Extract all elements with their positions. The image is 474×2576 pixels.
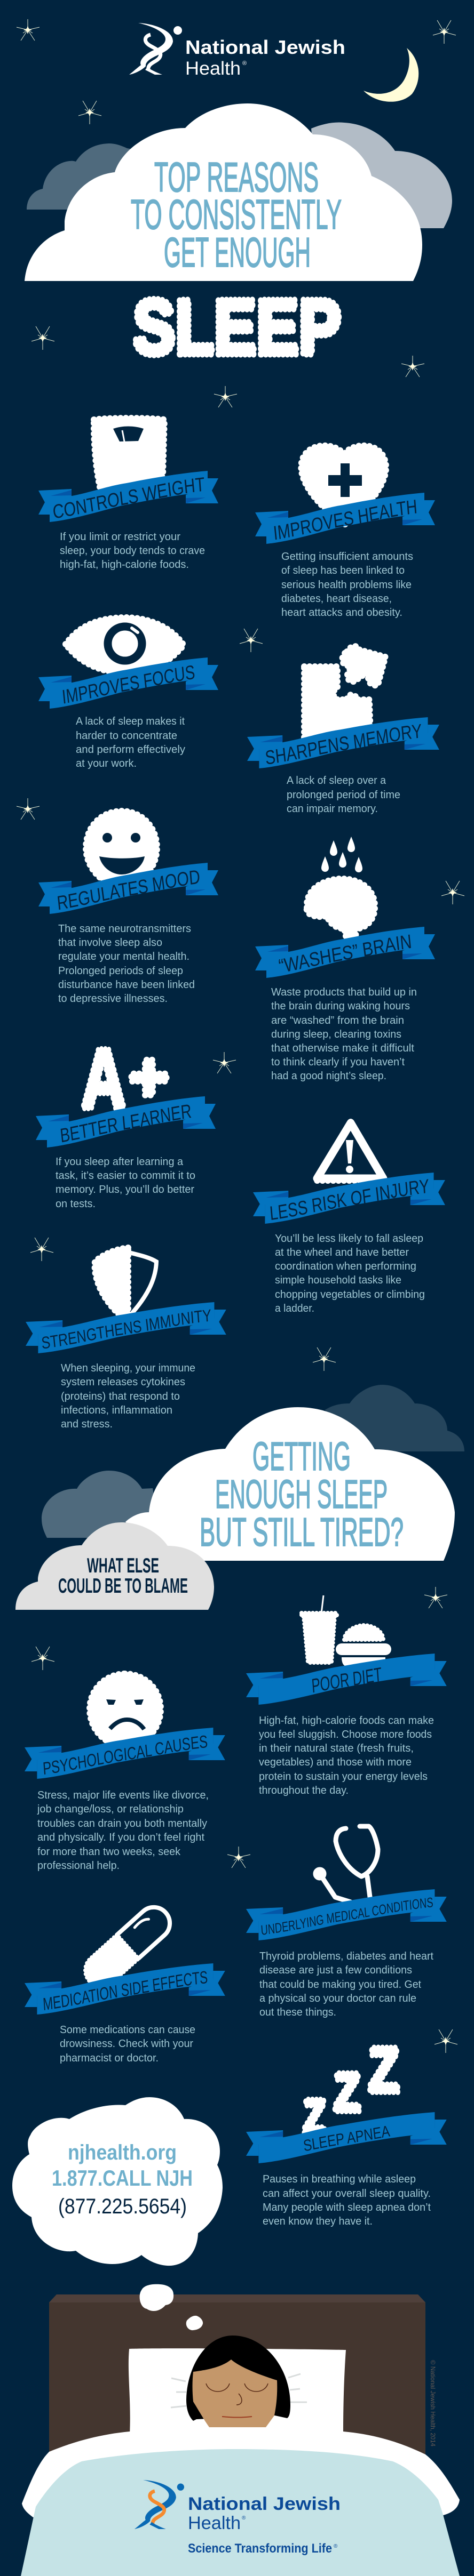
icon: A+: A	[81, 1031, 126, 1126]
icon: zzz: Z	[334, 2062, 360, 2123]
text block: during sleep, clearing toxins	[271, 1029, 401, 1040]
text block: harder to concentrate	[76, 730, 177, 742]
text block: pharmacist or doctor.	[60, 2052, 159, 2064]
feature: less risk of injury	[253, 1119, 445, 1314]
text block: throughout the day.	[259, 1785, 349, 1796]
logo: National Jewish Health bottom: Science Transforming Life	[188, 2541, 332, 2556]
text block: at the wheel and have better	[275, 1247, 409, 1258]
text block	[58, 923, 195, 1005]
icon: drink and burger	[302, 1595, 391, 1666]
text block: prolonged period of time	[287, 789, 400, 801]
text block: Stress, major life events like divorce,	[37, 1789, 209, 1801]
text block: serious health problems like	[281, 579, 412, 591]
text block: chopping vegetables or climbing	[275, 1289, 425, 1301]
text block: If you limit or restrict your	[60, 531, 180, 543]
text block: that involve sleep also	[58, 937, 162, 949]
text block: of sleep has been linked to	[281, 565, 405, 576]
text block: A lack of sleep over a	[287, 775, 386, 787]
feature: poor diet	[246, 1595, 447, 1796]
heading: getting enough sleep but still tired	[200, 1434, 404, 1554]
banner: CONTROLS WEIGHT	[53, 477, 204, 518]
text block: A lack of sleep makes it	[76, 716, 185, 727]
text block	[61, 1362, 195, 1430]
thought cloud: contact: njhealth.org	[68, 2141, 177, 2164]
text block: even know they have it.	[263, 2216, 373, 2227]
thought cloud: contact: (877.225.5654)	[58, 2195, 187, 2218]
feature: controls weight	[38, 415, 218, 571]
banner: STRENGTHENS IMMUNITY	[42, 1310, 211, 1349]
logo: National Jewish Health bottom	[135, 2480, 341, 2556]
feature: washes brain	[255, 837, 435, 1082]
logo: National Jewish Health bottom: Health	[188, 2513, 241, 2533]
text block: High-fat, high-calorie foods can make	[259, 1715, 434, 1727]
text block: If you sleep after learning a	[56, 1156, 184, 1168]
banner	[36, 1096, 216, 1147]
text block: heart attacks and obesity.	[281, 607, 402, 619]
banner	[255, 927, 435, 978]
cloud: what else could be to blame: COULD BE TO BLAME	[58, 1575, 188, 1598]
text block: the brain during waking hours	[271, 1000, 410, 1012]
text block	[60, 2024, 195, 2064]
text block	[281, 551, 413, 619]
text block: and physically. If you don’t feel right	[37, 1832, 204, 1843]
text block: had a good night’s sleep.	[271, 1070, 386, 1082]
banner: IMPROVES HEALTH	[274, 500, 416, 540]
banner	[246, 1654, 447, 1705]
banner: PSYCHOLOGICAL CAUSES	[43, 1735, 207, 1775]
text block: disturbance have been linked	[58, 979, 195, 991]
text block	[287, 775, 400, 815]
text block: Many people with sleep apnea don’t	[263, 2202, 431, 2213]
section clouds	[42, 1385, 464, 1561]
text block: can affect your overall sleep quality.	[263, 2188, 431, 2200]
feature: psychological causes	[25, 1671, 225, 1872]
banner: SLEEP APNEA	[304, 2126, 391, 2151]
text block: and stress.	[61, 1418, 113, 1430]
text block: protein to sustain your energy levels	[259, 1771, 428, 1783]
person: sleeping head	[186, 2336, 290, 2427]
banner: BETTER LEARNER	[61, 1105, 191, 1142]
logo: National Jewish Health top: ®	[242, 60, 247, 67]
text block: Waste products that build up in	[271, 986, 417, 998]
icon: stethoscope	[315, 1826, 378, 1902]
icon: heart with cross	[301, 446, 386, 525]
text block: that could be making you tired. Get	[259, 1979, 421, 1991]
text block: diabetes, heart disease,	[281, 593, 392, 605]
thought cloud: contact: 1.877.CALL NJH	[52, 2165, 193, 2190]
text block	[259, 1951, 433, 2018]
logo: National Jewish Health bottom: ®	[334, 2543, 338, 2549]
feature: medication side effects	[25, 1905, 225, 2064]
text block	[271, 986, 417, 1082]
text block	[60, 531, 205, 571]
icon: zzz: Z	[368, 2034, 399, 2106]
moon	[364, 48, 418, 102]
text block: on tests.	[56, 1198, 96, 1210]
title: GET ENOUGH	[164, 229, 311, 276]
icon: brain	[307, 879, 375, 941]
icon: smiley	[86, 811, 157, 886]
icon: scale	[94, 418, 164, 493]
text block: Pauses in breathing while asleep	[263, 2173, 416, 2185]
text block: system releases cytokines	[61, 1376, 185, 1388]
logo: National Jewish Health top: National Jewish	[185, 36, 345, 58]
text block: high-fat, high-calorie foods.	[60, 559, 189, 571]
text block: you feel sluggish. Choose more foods	[259, 1729, 432, 1740]
logo: National Jewish Health top: Health	[185, 58, 241, 79]
icon: zzz	[303, 2034, 399, 2144]
text block: professional help.	[37, 1860, 120, 1872]
cloud: what else could be to blame	[15, 1522, 214, 1610]
text block: in their natural state (fresh fruits,	[259, 1743, 414, 1754]
text block: are “washed” from the brain	[271, 1015, 404, 1026]
banner: “WASHES” BRAIN	[279, 934, 411, 972]
text block	[263, 2173, 431, 2227]
text block: for more than two weeks, seek	[37, 1846, 181, 1858]
text block: job change/loss, or relationship	[37, 1803, 184, 1815]
text block: Prolonged periods of sleep	[58, 965, 183, 977]
blanket	[21, 2431, 460, 2576]
icon: shield	[95, 1248, 156, 1316]
feature: sleep apnea	[246, 2034, 447, 2227]
text block: can impair memory.	[287, 803, 378, 815]
banner: SHARPENS MEMORY	[266, 724, 421, 764]
copyright: © National Jewish Health, 2014	[429, 2360, 437, 2446]
icon: eye	[66, 617, 184, 673]
banner: LESS RISK OF INJURY	[270, 1179, 428, 1220]
icon: zzz: Z	[303, 2090, 326, 2144]
text block: You’ll be less likely to fall asleep	[275, 1233, 423, 1245]
text block	[56, 1156, 195, 1210]
bed headboard	[49, 2294, 425, 2458]
banner	[38, 657, 218, 709]
icon: water drops	[321, 837, 362, 872]
banner: MEDICATION SIDE EFFECTS	[43, 1971, 207, 2010]
text block: out these things.	[259, 2007, 336, 2018]
text block: coordination when performing	[275, 1261, 416, 1272]
text block: at your work.	[76, 758, 137, 769]
icon: puzzle	[304, 646, 385, 739]
thought cloud: contact	[12, 2097, 223, 2266]
text block	[76, 716, 185, 769]
header clouds	[25, 103, 452, 281]
heading: getting enough sleep but still tired: GETTING	[252, 1434, 351, 1479]
text block: troubles can drain you both mentally	[37, 1818, 207, 1829]
icon: A+: +	[129, 1038, 169, 1116]
text block: regulate your mental health.	[58, 951, 189, 962]
text block: that otherwise make it difficult	[271, 1042, 414, 1054]
feature: better learner	[36, 1031, 216, 1210]
feature: regulates mood	[38, 808, 218, 1005]
title	[131, 154, 342, 276]
text block: simple household tasks like	[275, 1274, 401, 1286]
text block: drowsiness. Check with your	[60, 2038, 193, 2050]
text block: (proteins) that respond to	[61, 1391, 180, 1402]
banner: REGULATES MOOD	[58, 870, 200, 910]
text block: Getting insufficient amounts	[281, 551, 413, 563]
logo: National Jewish Health bottom: National Jewish	[188, 2494, 341, 2514]
text block: memory. Plus, you’ll do better	[56, 1184, 194, 1195]
heading: SLEEP: SLEEP	[133, 284, 341, 371]
feature: sharpens memory	[247, 643, 439, 815]
feature: strengthens immunity	[26, 1245, 226, 1430]
icon: sad face	[90, 1674, 161, 1746]
text block: When sleeping, your immune	[61, 1362, 195, 1374]
text block: disease are just a few conditions	[259, 1964, 412, 1976]
banner: IMPROVES FOCUS	[63, 665, 194, 704]
cloud: what else could be to blame: WHAT ELSE	[87, 1554, 159, 1577]
icon: warning triangle	[316, 1122, 384, 1181]
text block	[37, 1789, 209, 1872]
banner: UNDERLYING MEDICAL CONDITIONS	[262, 1897, 433, 1935]
title: TOP REASONS	[154, 154, 319, 200]
text block: vegetables) and those with more	[259, 1756, 412, 1768]
feature: improves focus	[38, 614, 218, 769]
text block: Some medications can cause	[60, 2024, 195, 2036]
text block: a physical so your doctor can rule	[259, 1993, 416, 2004]
text block: The same neurotransmitters	[58, 923, 191, 935]
text block: and perform effectively	[76, 744, 185, 756]
thought bubbles	[140, 2284, 203, 2330]
stars	[17, 19, 464, 2053]
text block: to think clearly if you haven’t	[271, 1056, 405, 1068]
text block: a ladder.	[275, 1303, 314, 1314]
banner: POOR DIET	[312, 1667, 381, 1692]
text block	[259, 1715, 434, 1796]
feature: improves health	[255, 443, 435, 619]
text block	[275, 1233, 425, 1314]
logo: National Jewish Health bottom: ®	[242, 2515, 246, 2521]
text block: task, it’s easier to commit it to	[56, 1170, 195, 1182]
logo: National Jewish Health top	[129, 23, 345, 79]
text block: Thyroid problems, diabetes and heart	[259, 1951, 433, 1962]
icon: pill	[79, 1900, 176, 1993]
text block: infections, inflammation	[61, 1405, 172, 1416]
banner	[246, 2112, 447, 2163]
feature: underlying medical conditions	[246, 1824, 447, 2018]
text block: to depressive illnesses.	[58, 993, 168, 1005]
pillow	[129, 2348, 346, 2434]
text block: sleep, your body tends to crave	[60, 545, 205, 557]
